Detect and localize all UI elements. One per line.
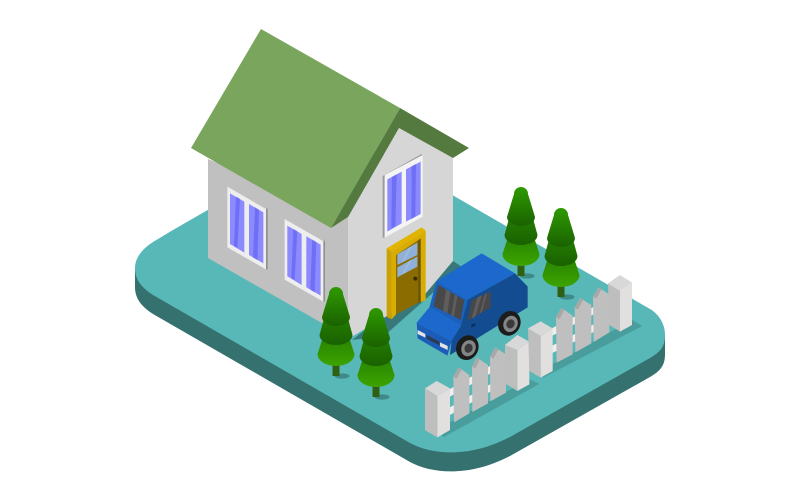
fence (425, 275, 642, 437)
fence post 1 (425, 388, 437, 437)
platform (135, 132, 665, 471)
car side (450, 273, 528, 355)
tree: back left (502, 187, 540, 279)
left wall (208, 159, 348, 338)
tree: front right (358, 308, 394, 400)
tree: back right (542, 208, 580, 300)
front wheel (452, 332, 483, 364)
fence rails (449, 352, 515, 397)
fence post 2 (505, 345, 517, 391)
roof (191, 29, 400, 228)
headlights and grille (418, 330, 425, 338)
house (191, 29, 469, 338)
fence pickets (453, 367, 469, 422)
car hood (417, 307, 461, 341)
roof underside gable (331, 108, 469, 228)
house shadow (352, 261, 462, 340)
car front (417, 323, 452, 356)
rear wheel (494, 307, 525, 339)
right wall (348, 128, 453, 338)
car roof (437, 253, 515, 299)
windshield (433, 285, 464, 320)
window: gable wall (383, 154, 423, 238)
fence shadows (438, 379, 539, 437)
door (387, 227, 426, 319)
window: left wall 2 (285, 219, 325, 302)
windshield panel (429, 281, 468, 326)
side window (467, 292, 491, 321)
window: left wall 1 (227, 187, 268, 269)
tree: front left (318, 287, 354, 379)
fence post 3 (528, 328, 541, 378)
fence post 4 (608, 283, 620, 332)
car (417, 253, 528, 364)
